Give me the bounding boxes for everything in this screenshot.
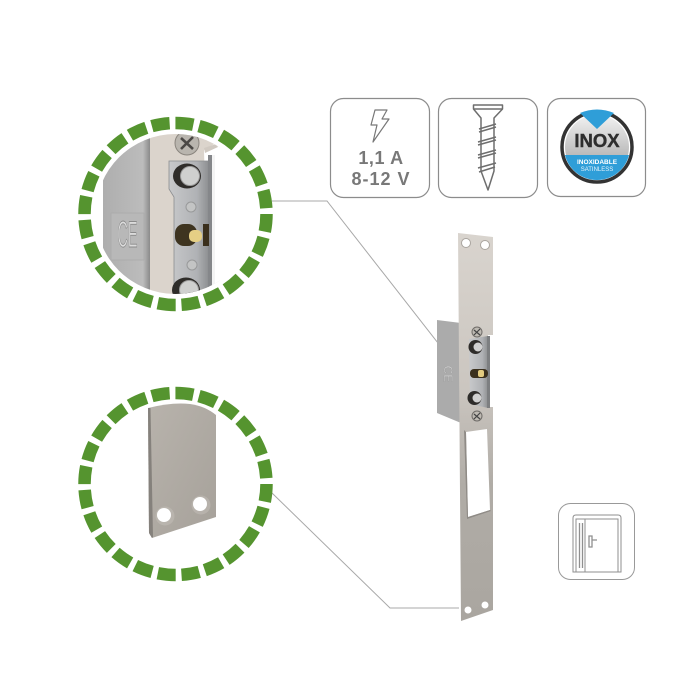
- voltage value: 8-12 V: [351, 169, 411, 189]
- dashed green ring: [84, 393, 266, 575]
- dashed green ring: [84, 123, 266, 305]
- leader line: top detail to strike: [272, 201, 470, 384]
- leader line: bottom detail to strike: [272, 493, 459, 608]
- badge: INOX: INOXIDABLE: [577, 159, 618, 166]
- detail photo: [103, 130, 222, 302]
- icon card: screw: [438, 98, 538, 198]
- badge: INOX: SATINLESS: [581, 167, 613, 173]
- detail plate: [148, 404, 216, 538]
- faceplate: [458, 233, 493, 621]
- CE mark: CE: [441, 366, 455, 382]
- icon: screw: [474, 105, 502, 190]
- electric strike product: [437, 233, 493, 621]
- mounting holes: [462, 238, 490, 614]
- latch mechanism: [468, 327, 490, 421]
- detail photo: CE: [118, 214, 137, 255]
- icon: door: [573, 515, 621, 572]
- badge: INOX: INOX: [574, 130, 620, 151]
- panel: zoomed plate detail: [84, 393, 266, 575]
- icon card: INOX badge: [548, 98, 646, 196]
- icon card: electrical rating: [330, 98, 430, 198]
- icon card: door: [558, 504, 634, 580]
- icon: lightning bolt: [371, 110, 389, 142]
- lock body: [437, 320, 461, 423]
- current value: 1,1 A: [358, 148, 404, 168]
- badge: INOX: [560, 110, 634, 185]
- infographic canvas: [78, 98, 646, 621]
- panel: zoomed lock detail: [84, 123, 266, 305]
- window frame edge: [464, 430, 491, 519]
